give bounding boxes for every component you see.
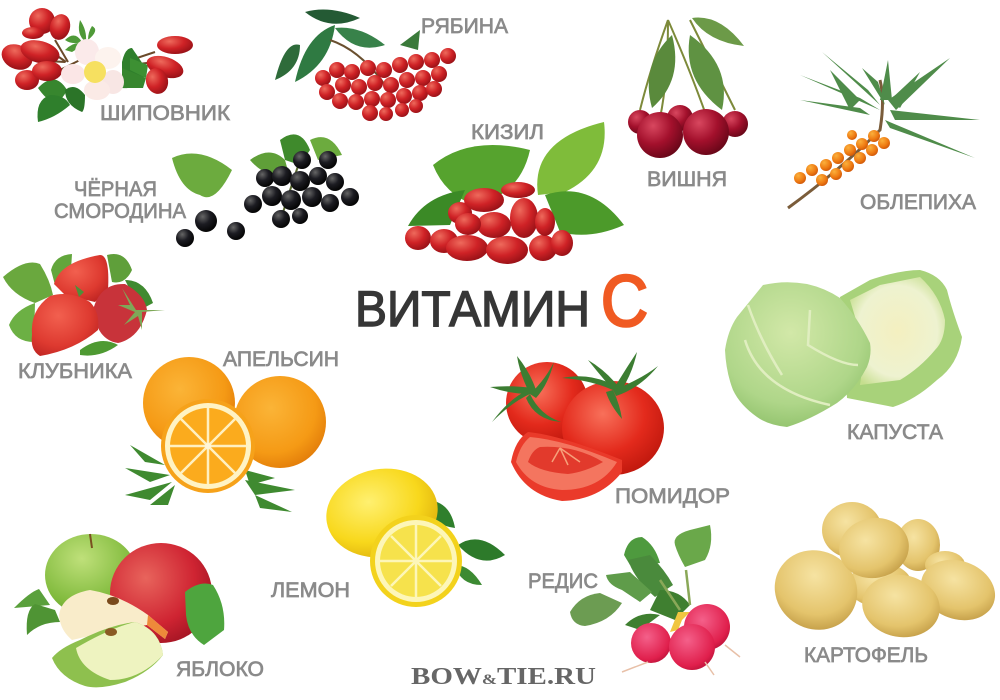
icon: sea buckthorn	[788, 52, 980, 208]
icon: tomatoes	[490, 352, 664, 501]
icon: rowan	[275, 10, 456, 121]
label: potato: КАРТОФЕЛЬ	[804, 644, 928, 667]
label: black currant: СМОРОДИНА	[54, 200, 186, 223]
watermark: BOW &TIE.RU	[411, 664, 596, 690]
icon: oranges	[125, 357, 326, 512]
icon: apples	[14, 534, 224, 687]
label: strawberry: КЛУБНИКА	[18, 360, 132, 383]
title: ВИТАМИН	[355, 281, 590, 337]
icon: cabbage	[725, 270, 962, 427]
icon: lemons	[319, 460, 505, 607]
icon: radish	[570, 525, 740, 675]
label: rowan: РЯБИНА	[421, 15, 508, 38]
label: rosehip: ШИПОВНИК	[100, 102, 231, 125]
title accent: C	[601, 262, 648, 342]
icon: cherries	[628, 18, 748, 158]
label: orange: АПЕЛЬСИН	[223, 348, 339, 371]
label: tomato: ПОМИДОР	[615, 485, 730, 508]
icon: strawberry	[3, 254, 165, 356]
icon: cornel	[405, 122, 624, 264]
label: black currant: ЧЁРНАЯ	[74, 178, 157, 201]
label: lemon: ЛЕМОН	[271, 579, 350, 602]
label: cherries: ВИШНЯ	[647, 168, 727, 191]
icon: rosehip	[0, 8, 193, 122]
label: radish: РЕДИС	[528, 570, 598, 593]
label: cornel: КИЗИЛ	[471, 121, 544, 144]
label: apple: ЯБЛОКО	[176, 658, 264, 681]
icon: potatoes	[760, 502, 1000, 645]
icon: black currant	[172, 134, 359, 247]
label: cabbage: КАПУСТА	[847, 421, 943, 444]
label: sea buckthorn: ОБЛЕПИХА	[860, 191, 976, 214]
